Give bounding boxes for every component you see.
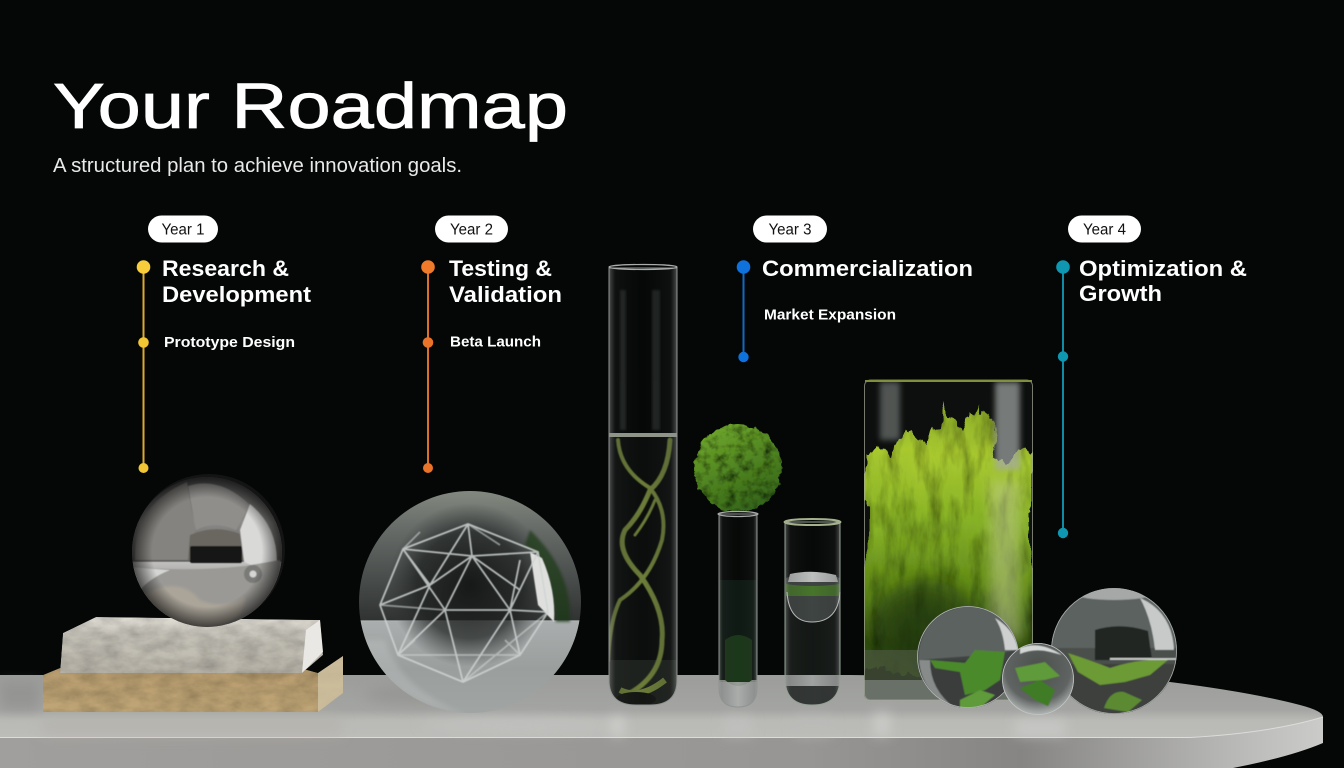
glass sphere with polyhedron (355, 491, 587, 717)
tall test tube with vine (608, 264, 677, 708)
year 3 pill (753, 216, 827, 242)
slim test tube (718, 512, 758, 709)
year 2 heading: Validation (449, 282, 562, 307)
year 3 heading: Commercialization (762, 256, 973, 281)
year 4 pill: Year 4 (1083, 222, 1126, 238)
glass ball small with leaves (1002, 643, 1074, 715)
milestone: year 1 (137, 216, 312, 473)
reflections on table (0, 682, 1065, 736)
year 3 milestone: Market Expansion (764, 308, 896, 324)
year 2 pill: Year 2 (450, 222, 493, 238)
glass jar with aquatic moss (864, 380, 1033, 700)
moss mass (864, 398, 1033, 672)
polyhedron (380, 524, 548, 682)
upper limestone (60, 617, 323, 673)
subtitle: A structured plan to achieve innovation goals. (53, 155, 462, 177)
panel reflections (135, 482, 195, 560)
year 2 pill (435, 216, 508, 242)
year 1 timeline (137, 260, 150, 473)
moss ball (694, 424, 782, 512)
milestone: year 4 (1056, 216, 1247, 538)
year 4 pill (1068, 216, 1141, 242)
title: Your Roadmap (53, 70, 568, 142)
short test tube with water (784, 519, 840, 707)
metal sphere (131, 474, 285, 628)
milestone: year 2 (421, 216, 562, 473)
vine (608, 440, 670, 693)
year 2 timeline (421, 260, 435, 473)
year 2 heading: Testing & (449, 256, 552, 281)
milestone: year 3 (737, 216, 973, 362)
table (0, 675, 1323, 768)
year 4 heading: Optimization & (1079, 256, 1247, 281)
year 1 milestone: Prototype Design (164, 335, 295, 351)
lower sandstone (43, 656, 343, 712)
year 4 heading: Growth (1079, 281, 1162, 306)
year 1 pill (148, 216, 218, 242)
glass ball medium with leaves (917, 606, 1019, 712)
year 3 pill: Year 3 (768, 222, 812, 238)
stone stack (43, 617, 343, 712)
year 2 milestone: Beta Launch (450, 334, 541, 350)
year 1 heading: Research & (162, 256, 289, 281)
glass ball large with leaves (1051, 588, 1180, 714)
year 3 timeline (737, 260, 750, 362)
year 1 heading: Development (162, 282, 312, 307)
year 1 pill: Year 1 (162, 222, 204, 238)
year 4 timeline (1056, 260, 1070, 538)
